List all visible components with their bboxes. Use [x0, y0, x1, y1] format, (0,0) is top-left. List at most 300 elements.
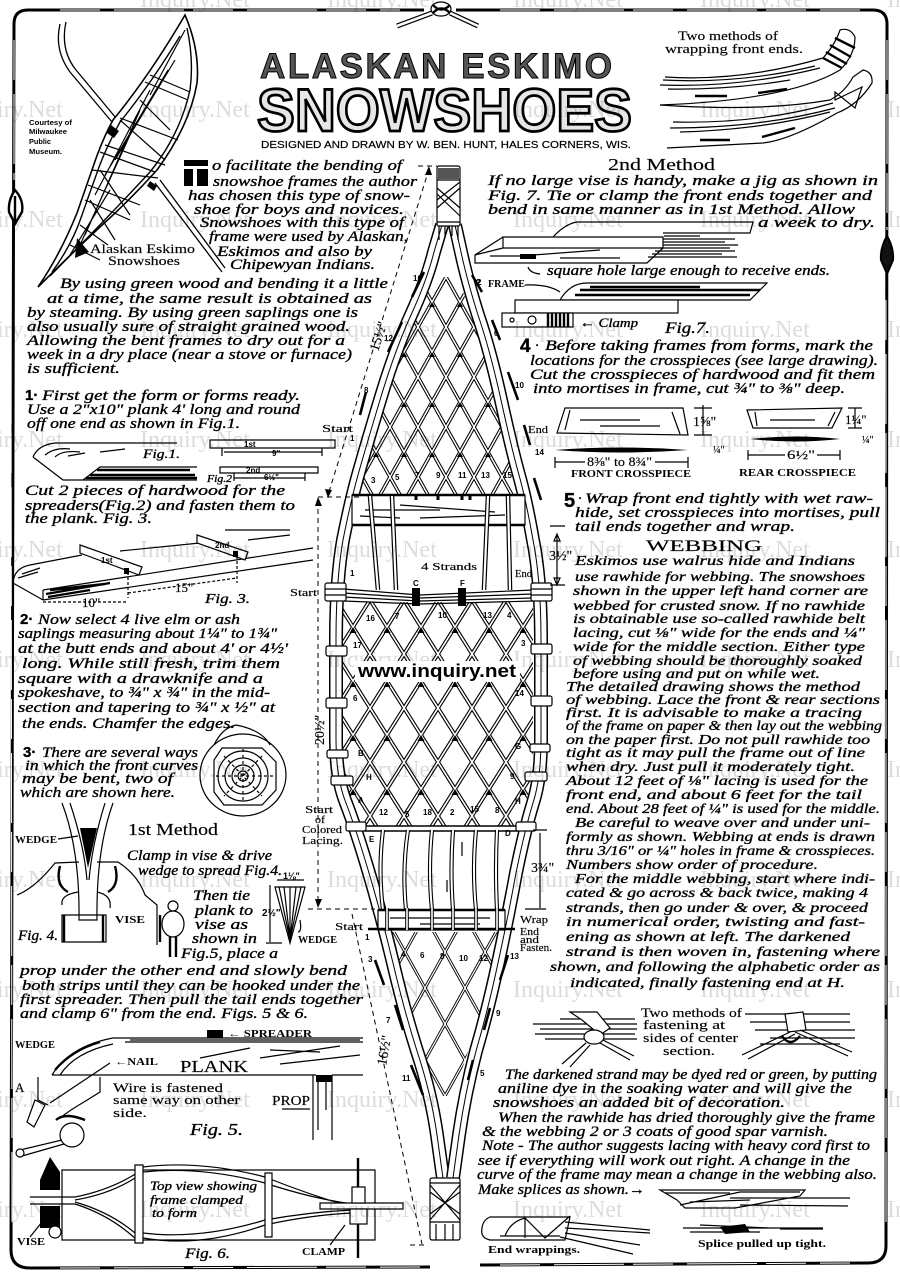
- watermark grid: Inquiry.Net: [513, 757, 623, 783]
- rear crosspiece detail: 6½": [787, 447, 815, 462]
- title: ALASKAN ESKIMO: [260, 47, 612, 86]
- webbing text: shown in the upper left hand corner are: [573, 584, 868, 599]
- fig 3: plank with spreaders: 15": [175, 580, 193, 595]
- two methods of wrapping front ends: [660, 28, 872, 148]
- watermark grid: Inquiry.Net: [327, 757, 437, 783]
- two methods of wrapping front ends: wrapping front ends.: [665, 41, 803, 56]
- fig 1: plank form: Fig.1.: [142, 446, 180, 461]
- sapling cross-section: [200, 725, 286, 816]
- step 2 text: 2·: [20, 611, 33, 628]
- tip wrapping: [437, 166, 460, 240]
- step 1 text: off one end as shown in Fig.1.: [27, 416, 240, 432]
- green wood paragraph: week in a dry place (near a stove or furnace): [27, 347, 352, 363]
- webbing text: is obtainable use so-called rawhide belt: [573, 612, 866, 627]
- webbing text: lacing, cut ⅛" wide for the ends and ¼": [573, 626, 865, 641]
- watermark grid: Inquiry.Net: [513, 427, 623, 453]
- watermark grid: Inquiry.Net: [140, 647, 250, 673]
- fig 6: top view frame clamped: frame clamped: [150, 1193, 244, 1207]
- watermark grid: Inquiry.Net: [327, 207, 437, 233]
- number labels: 14: [535, 448, 544, 457]
- clamp and wedge text: both strips until they can be hooked under the: [22, 978, 360, 994]
- darkened strand and note text: Note - The author suggests lacing with heavy cord first to: [481, 1138, 871, 1154]
- splice illustration: [660, 1190, 850, 1250]
- webbing text: tight as it may pull the frame out of line: [566, 746, 865, 761]
- caption: museum courtesy: Museum.: [29, 149, 62, 156]
- watermark grid: Inquiry.Net: [327, 1197, 437, 1223]
- fastening methods illustration: fastening at: [643, 1018, 726, 1032]
- fig 6: top view frame clamped: to form: [152, 1206, 197, 1220]
- webbing text: when dry. Just pull it moderately tight.: [566, 760, 855, 775]
- fig 6: top view frame clamped: VISE: [17, 1237, 45, 1248]
- fig 6: top view frame clamped: Fig. 6.: [184, 1246, 230, 1262]
- step 4 text: Cut the crosspieces of hardwood and fit them: [530, 367, 875, 383]
- shoe text annotations: Start: [335, 922, 363, 933]
- watermark grid: Inquiry.Net: [700, 427, 810, 453]
- rear crosspiece detail: 1¼": [845, 412, 867, 427]
- step 2 text: at the butt ends and about 4' or 4½': [18, 641, 289, 657]
- number labels: 9: [436, 471, 441, 480]
- fig 3: plank with spreaders: 10": [82, 595, 100, 610]
- watermark grid: Inquiry.Net: [327, 1087, 437, 1113]
- dimension: 3 1/2: [550, 526, 565, 585]
- webbing text: use rawhide for webbing. The snowshoes: [575, 570, 866, 585]
- step 2 text: saplings measuring about 1¼" to 1¾": [18, 626, 278, 642]
- clamp and wedge text: Fig.5, place a: [180, 946, 278, 962]
- watermark grid: Inquiry.Net: [327, 427, 437, 453]
- step 1 text: 1·: [25, 387, 38, 404]
- watermark grid: Inquiry.Net: [140, 757, 250, 783]
- wedge detail: WEDGE: [298, 935, 337, 946]
- fig 5: bending frame on plank: A: [15, 1080, 25, 1095]
- fig 4: vise with wedge: Fig. 4.: [17, 928, 58, 944]
- webbing heading: WEBBING: [646, 538, 763, 555]
- number labels: 4: [507, 611, 512, 620]
- number labels: 6: [353, 694, 358, 703]
- shoe text annotations: [290, 424, 552, 954]
- number labels: 7: [395, 612, 400, 621]
- fig 7: frame and clamp: Fig.7.: [664, 320, 710, 337]
- watermark grid: Inquiry.Net: [700, 757, 810, 783]
- number labels: 2: [450, 808, 455, 817]
- end wrappings illustration: [482, 1216, 650, 1256]
- second method text: a week to dry.: [758, 215, 875, 231]
- clamp and wedge text: vise as: [195, 917, 248, 933]
- watermark grid: Inquiry.Net: [327, 537, 437, 563]
- number labels: 1: [350, 569, 355, 578]
- fastening methods illustration: section.: [663, 1044, 715, 1058]
- fig 5: bending frame on plank: Fig. 5.: [189, 1120, 243, 1139]
- step 4 text: ·: [535, 338, 539, 354]
- number labels: 9: [496, 1009, 501, 1018]
- number labels: E: [369, 835, 375, 844]
- wedge detail: [262, 871, 337, 946]
- second method heading: 2nd Method: [608, 155, 716, 174]
- webbing text: [550, 554, 882, 991]
- fig 4: vise with wedge: [15, 803, 184, 957]
- step 3 text: which are shown here.: [20, 785, 175, 801]
- front crosspiece detail: ¼": [713, 445, 725, 456]
- webbing text: wide for the middle section. Either type: [573, 640, 865, 655]
- fig 3: plank with spreaders: 1st: [101, 556, 113, 565]
- middle webbing: [343, 600, 533, 829]
- fastening methods illustration: sides of center: [643, 1031, 739, 1045]
- fig 6: top view frame clamped: Top view showing: [150, 1179, 257, 1193]
- fig 6: top view frame clamped: CLAMP: [302, 1247, 345, 1258]
- step 1 text: [25, 387, 301, 432]
- webbing text: For the middle webbing, start where indi-: [574, 872, 875, 887]
- watermark grid: Inquiry.Net: [140, 97, 250, 123]
- large snowshoe detailed drawing: [325, 166, 552, 1240]
- caption: shoe name: Alaskan Eskimo: [90, 241, 195, 256]
- shoe text annotations: Wrap: [520, 915, 548, 926]
- webbing text: of webbing should be thoroughly soaked: [573, 654, 863, 669]
- number labels: 11: [402, 1074, 411, 1083]
- second method text: If no large vise is handy, make a jig as shown in: [487, 173, 878, 189]
- heading: first method: 1st Method: [128, 820, 219, 839]
- frame wrap bands: [326, 644, 552, 785]
- shoe text annotations: of: [315, 815, 326, 826]
- step 5 text: ·: [578, 491, 582, 507]
- watermark grid: Inquiry.Net: [700, 317, 810, 343]
- caption: museum courtesy: Public: [29, 139, 51, 146]
- watermark grid: Inquiry.Net: [140, 317, 250, 343]
- fastening spreaders text: spreaders(Fig.2) and fasten them to: [25, 498, 296, 514]
- webbing text: strand is then woven in, fastening where: [566, 945, 880, 960]
- step 2 text: [18, 611, 289, 732]
- number labels: 2: [477, 278, 482, 287]
- fastening spreaders text: [25, 483, 296, 527]
- intro paragraph: shoe for boys and novices.: [194, 202, 404, 218]
- number labels: 5: [405, 810, 410, 819]
- dimension: 20 1/2: 20½": [313, 715, 328, 745]
- second shoe behind: [58, 22, 225, 272]
- number labels: 12: [479, 954, 488, 963]
- number labels: 9: [510, 772, 515, 781]
- intro paragraph: has chosen this type of snow-: [188, 188, 410, 204]
- watermark grid: Inquiry.Net: [513, 867, 623, 893]
- darkened strand and note text: When the rawhide has dried thoroughly give the frame: [498, 1110, 875, 1126]
- fig 5: bending frame on plank: same way on other: [113, 1092, 241, 1107]
- rear crosspiece detail: REAR CROSSPIECE: [739, 468, 856, 479]
- watermark grid: Inquiry.Net: [513, 1087, 623, 1113]
- number labels: C: [413, 579, 419, 588]
- webbing text: ening as shown at left. The darkened: [566, 930, 851, 945]
- number labels: 14: [515, 689, 524, 698]
- step 2 text: square with a drawknife and a: [18, 671, 263, 687]
- step 2 text: section and tapering to ¾" x ½" at: [18, 700, 276, 716]
- title: [257, 47, 632, 151]
- green wood paragraph: By using green wood and bending it a little: [60, 276, 388, 292]
- green wood paragraph: Allowing the bent frames to dry out for a: [26, 333, 345, 349]
- number labels: H: [515, 797, 521, 806]
- number labels: 16: [413, 274, 422, 283]
- dimension: 15 1/2: 15½": [368, 320, 391, 353]
- fig 7: frame and clamp: FRAME: [488, 279, 525, 290]
- green wood paragraph: at a time, the same result is obtained as: [47, 291, 372, 307]
- fig 5: bending frame on plank: [15, 1029, 363, 1157]
- front crosspiece detail: 1⅝": [693, 415, 716, 430]
- shoe text annotations: Start: [322, 424, 353, 435]
- step 3 text: in which the front curves: [25, 758, 198, 774]
- fig 5: bending frame on plank: PROP: [272, 1094, 310, 1109]
- fig 4: vise with wedge: VISE: [115, 915, 145, 926]
- webbing text: webbed for crusted snow. If no rawhide: [573, 599, 865, 614]
- fig 2: spreaders: 9": [272, 449, 280, 458]
- number labels: 3: [368, 955, 373, 964]
- watermark grid: Inquiry.Net: [140, 977, 250, 1003]
- green wood paragraph: by steaming. By using green saplings one is: [27, 305, 358, 321]
- rear strand bar and verticals: [346, 822, 536, 910]
- step 5 text: hide, set crosspieces into mortises, pull: [575, 505, 880, 521]
- clamp and wedge text: plank to: [194, 903, 254, 919]
- shoe text annotations: Fasten.: [520, 943, 552, 954]
- shoe dimension lines: 3¾": [531, 861, 554, 876]
- rear crosspiece detail: ¼": [862, 435, 874, 446]
- shoe text annotations: Colored: [302, 825, 342, 836]
- lashing thick strokes on frame: [360, 272, 541, 1095]
- webbing text: before using and put on while wet.: [573, 667, 820, 682]
- step 4 text: Before taking frames from forms, mark the: [545, 338, 873, 354]
- number labels: 5: [395, 473, 400, 482]
- clamp and wedge text: shown in: [192, 931, 257, 947]
- watermark grid: Inquiry.Net: [513, 537, 623, 563]
- step 3 text: There are several ways: [42, 745, 198, 761]
- watermark grid: Inquiry.Net: [140, 1087, 250, 1113]
- title: DESIGNED AND DRAWN BY W. BEN. HUNT, HALES CORNERS, WIS.: [261, 139, 631, 151]
- clamp and wedge text: and clamp 6" from the end. Figs. 5 & 6.: [20, 1006, 308, 1022]
- step 4 text: into mortises in frame, cut ¾" to ⅜" deep.: [533, 381, 845, 397]
- caption: museum courtesy: Courtesy of: [29, 120, 73, 127]
- watermark grid: Inquiry.Net: [327, 867, 437, 893]
- fig 7: frame and clamp: [476, 278, 767, 337]
- watermark grid: Inquiry.Net: [513, 207, 623, 233]
- front crosspiece detail: 8⅜" to 8¾": [587, 454, 652, 469]
- watermark grid: Inquiry.Net: [700, 647, 810, 673]
- shoe dimension lines: [308, 166, 572, 1245]
- front crosspiece: [352, 494, 525, 590]
- rear crosspiece: [368, 908, 515, 930]
- fig 1: plank form: [33, 443, 197, 480]
- intro paragraph: Snowshoes with this type of: [200, 215, 406, 231]
- webbing text: front end, and about 6 feet for the tail: [566, 788, 862, 803]
- wedge detail: 1⅛": [283, 871, 300, 881]
- clamp and wedge text: [19, 848, 363, 1022]
- number labels: 11: [458, 471, 467, 480]
- clamp and wedge text: Clamp in vise & drive: [127, 848, 272, 864]
- number labels: 12: [384, 334, 393, 343]
- clamp and wedge text: first spreader. Then pull the tail ends together: [20, 992, 363, 1008]
- knot: top centre: [397, 2, 478, 26]
- knot: left side: [9, 190, 22, 224]
- centre strands: [325, 583, 552, 606]
- webbing text: indicated, finally fastening end at H.: [570, 976, 845, 991]
- webbing text: of webbing. Lace the front & rear sections: [566, 693, 881, 708]
- number labels: 10: [515, 381, 524, 390]
- rear crosspiece detail: [739, 408, 874, 479]
- number labels: 4: [401, 950, 406, 959]
- watermark grid: Inquiry.Net: [140, 207, 250, 233]
- number labels: 3: [371, 476, 376, 485]
- frame left: [336, 225, 443, 1178]
- webbing text: Eskimos use walrus hide and Indians: [574, 554, 856, 569]
- two methods of wrapping front ends: Two methods of: [678, 28, 779, 43]
- intro paragraph: frame were used by Alaskan,: [209, 229, 408, 245]
- number labels: 3: [521, 639, 526, 648]
- dimension: 16 1/2: 16½": [375, 1034, 395, 1067]
- watermark grid: Inquiry.Net: [513, 647, 623, 673]
- clamp and wedge text: wedge to spread Fig.4.: [138, 863, 282, 879]
- webbing text: thru 3/16" or ¼" holes in frame & crosspieces.: [566, 844, 875, 859]
- fig 7: frame and clamp: ← Clamp: [580, 315, 639, 330]
- watermark grid: Inquiry.Net: [513, 97, 623, 123]
- step 5 text: [564, 490, 880, 535]
- number labels: 5: [480, 1069, 485, 1078]
- darkened strand and note text: Make splices as shown.→: [477, 1182, 645, 1198]
- shoe text annotations: End: [515, 569, 532, 580]
- second method text: [487, 173, 878, 231]
- step 2 text: spokeshave, to ¾" x ¾" in the mid-: [18, 685, 270, 701]
- number labels: 1: [350, 434, 355, 443]
- fig 5: bending frame on plank: WEDGE: [15, 1040, 55, 1051]
- webbing text: shown, and following the alphabetic order as: [550, 960, 881, 975]
- front webbing: [358, 277, 520, 497]
- wedge detail: 2½": [262, 908, 281, 919]
- fig 4: vise with wedge: WEDGE: [15, 835, 57, 846]
- webbing text: About 12 feet of ⅛" lacing is used for the: [565, 774, 868, 789]
- shoe text annotations: Start: [290, 588, 317, 599]
- jig illustration: [475, 222, 830, 279]
- step 3 text: 3·: [23, 744, 36, 761]
- second method text: bend in same manner as in 1st Method. Allow: [488, 202, 855, 218]
- fig 2: spreaders: 1st: [244, 440, 256, 449]
- darkened strand and note text: aniline dye in the soaking water and will give the: [498, 1081, 852, 1097]
- fastening methods illustration: [533, 1006, 855, 1067]
- watermark grid: Inquiry.Net: [700, 977, 810, 1003]
- frame right: [453, 225, 541, 1178]
- number labels: 18: [423, 808, 432, 817]
- clamp and wedge text: Then tie: [193, 888, 250, 904]
- green wood paragraph: is sufficient.: [27, 361, 120, 377]
- step 5 text: 5: [564, 490, 575, 512]
- second method text: Fig. 7. Tie or clamp the front ends together and: [487, 188, 873, 204]
- step 4 text: locations for the crosspieces (see large drawing).: [530, 353, 878, 369]
- fig 5: bending frame on plank: PLANK: [180, 1057, 249, 1076]
- step 3 text: [20, 744, 198, 801]
- fastening methods illustration: Two methods of: [641, 1006, 743, 1020]
- darkened strand and note text: see if everything will work out right. A change in the: [478, 1153, 850, 1169]
- shoe text annotations: Lacing.: [302, 836, 343, 847]
- number labels: 6: [420, 951, 425, 960]
- fastening spreaders text: Cut 2 pieces of hardwood for the: [25, 483, 285, 499]
- knot: right side: [881, 236, 893, 274]
- watermark grid: Inquiry.Net: [327, 647, 437, 673]
- webbing text: Be careful to weave over and under uni-: [575, 816, 870, 831]
- fig 5: bending frame on plank: Wire is fastened: [113, 1080, 224, 1095]
- watermark grid: Inquiry.Net: [513, 977, 623, 1003]
- darkened strand and note text: snowshoes an added bit of decoration.: [493, 1095, 785, 1111]
- number labels: [350, 274, 544, 1083]
- number labels: 13: [483, 611, 492, 620]
- website stamp: www.inquiry.net: [357, 661, 516, 681]
- step 5 text: tail ends together and wrap.: [575, 519, 795, 535]
- number labels: F: [460, 579, 465, 588]
- green wood paragraph: [26, 276, 388, 377]
- front crosspiece detail: FRONT CROSSPIECE: [571, 469, 691, 480]
- fig 2: spreaders: 2nd: [246, 466, 260, 475]
- number labels: 8: [364, 386, 369, 395]
- shoe text annotations: Start: [305, 805, 333, 816]
- number labels: 16: [366, 614, 375, 623]
- watermark grid: Inquiry.Net: [140, 537, 250, 563]
- webbing text: Numbers show order of procedure.: [565, 858, 818, 873]
- darkened strand and note text: & the webbing 2 or 3 coats of good spar varnish.: [482, 1124, 828, 1140]
- number labels: B: [358, 749, 364, 758]
- darkened strand and note text: The darkened strand may be dyed red or green, by putting: [505, 1067, 878, 1083]
- webbing text: in numerical order, twisting and fast-: [566, 915, 865, 930]
- number labels: G: [515, 742, 521, 751]
- number labels: 6: [494, 329, 499, 338]
- watermark grid: Inquiry.Net: [140, 1197, 250, 1223]
- number labels: 15: [503, 471, 512, 480]
- step 4 text: [520, 336, 878, 397]
- shoe text annotations: and: [520, 935, 539, 946]
- webbing text: cated & go across & back twice, making 4: [566, 886, 868, 901]
- webbing text: of the frame on paper & then lay out the webbing: [566, 719, 882, 734]
- shoe dimension lines: 3½": [549, 549, 572, 564]
- green wood paragraph: also usually sure of straight grained wood.: [27, 319, 350, 335]
- fastening spreaders text: the plank. Fig. 3.: [25, 511, 152, 527]
- fig 3: plank with spreaders: Fig. 3.: [204, 592, 250, 607]
- webbing text: on the paper first. Do not pull rawhide too: [566, 733, 870, 748]
- number labels: A: [358, 796, 364, 805]
- caption: museum courtesy: Milwaukee: [29, 129, 67, 136]
- watermark grid: Inquiry.Net: [700, 1197, 810, 1223]
- intro paragraph: Eskimos and also by: [216, 244, 372, 260]
- darkened strand and note text: curve of the frame may mean a change in the webbing also.: [477, 1167, 877, 1183]
- title: SNOWSHOES: [257, 77, 632, 144]
- shoe text annotations: 4 Strands: [421, 562, 477, 573]
- watermark grid: Inquiry.Net: [700, 207, 810, 233]
- step 1 text: First get the form or forms ready.: [41, 388, 300, 404]
- webbing text: end. About 28 feet of ¼" is used for the middle.: [566, 802, 880, 817]
- fig 2: spreaders: Fig.2: [206, 473, 233, 485]
- fig 5: bending frame on plank: ←NAIL: [115, 1057, 158, 1068]
- intro paragraph: o facilitate the bending of: [212, 158, 404, 174]
- end wrappings illustration: End wrappings.: [488, 1244, 580, 1256]
- darkened strand and note text: [477, 1067, 878, 1198]
- number labels: 1: [365, 933, 370, 942]
- clamp and wedge text: prop under the other end and slowly bend: [19, 963, 348, 979]
- intro paragraph: Chipewyan Indians.: [230, 257, 375, 273]
- caption: shoe name: [90, 241, 195, 268]
- step 2 text: long. While still fresh, trim them: [22, 656, 280, 672]
- number labels: 10: [438, 611, 447, 620]
- shoe text annotations: End: [528, 425, 548, 436]
- rear webbing: [392, 932, 500, 1096]
- fig 2: spreaders: 6½": [264, 473, 279, 482]
- watermark grid: Inquiry.Net: [700, 537, 810, 563]
- number labels: 13: [481, 471, 490, 480]
- webbing text: formly as shown. Webbing at ends is drawn: [566, 830, 875, 845]
- watermark grid: Inquiry.Net: [700, 97, 810, 123]
- webbing text: The detailed drawing shows the method: [566, 680, 861, 695]
- step 5 text: Wrap front end tightly with wet raw-: [585, 491, 873, 507]
- shoe text annotations: End: [520, 927, 539, 938]
- front crosspiece detail: [555, 405, 725, 480]
- number labels: 12: [379, 808, 388, 817]
- number labels: 7: [386, 1016, 391, 1025]
- number labels: D: [505, 829, 511, 838]
